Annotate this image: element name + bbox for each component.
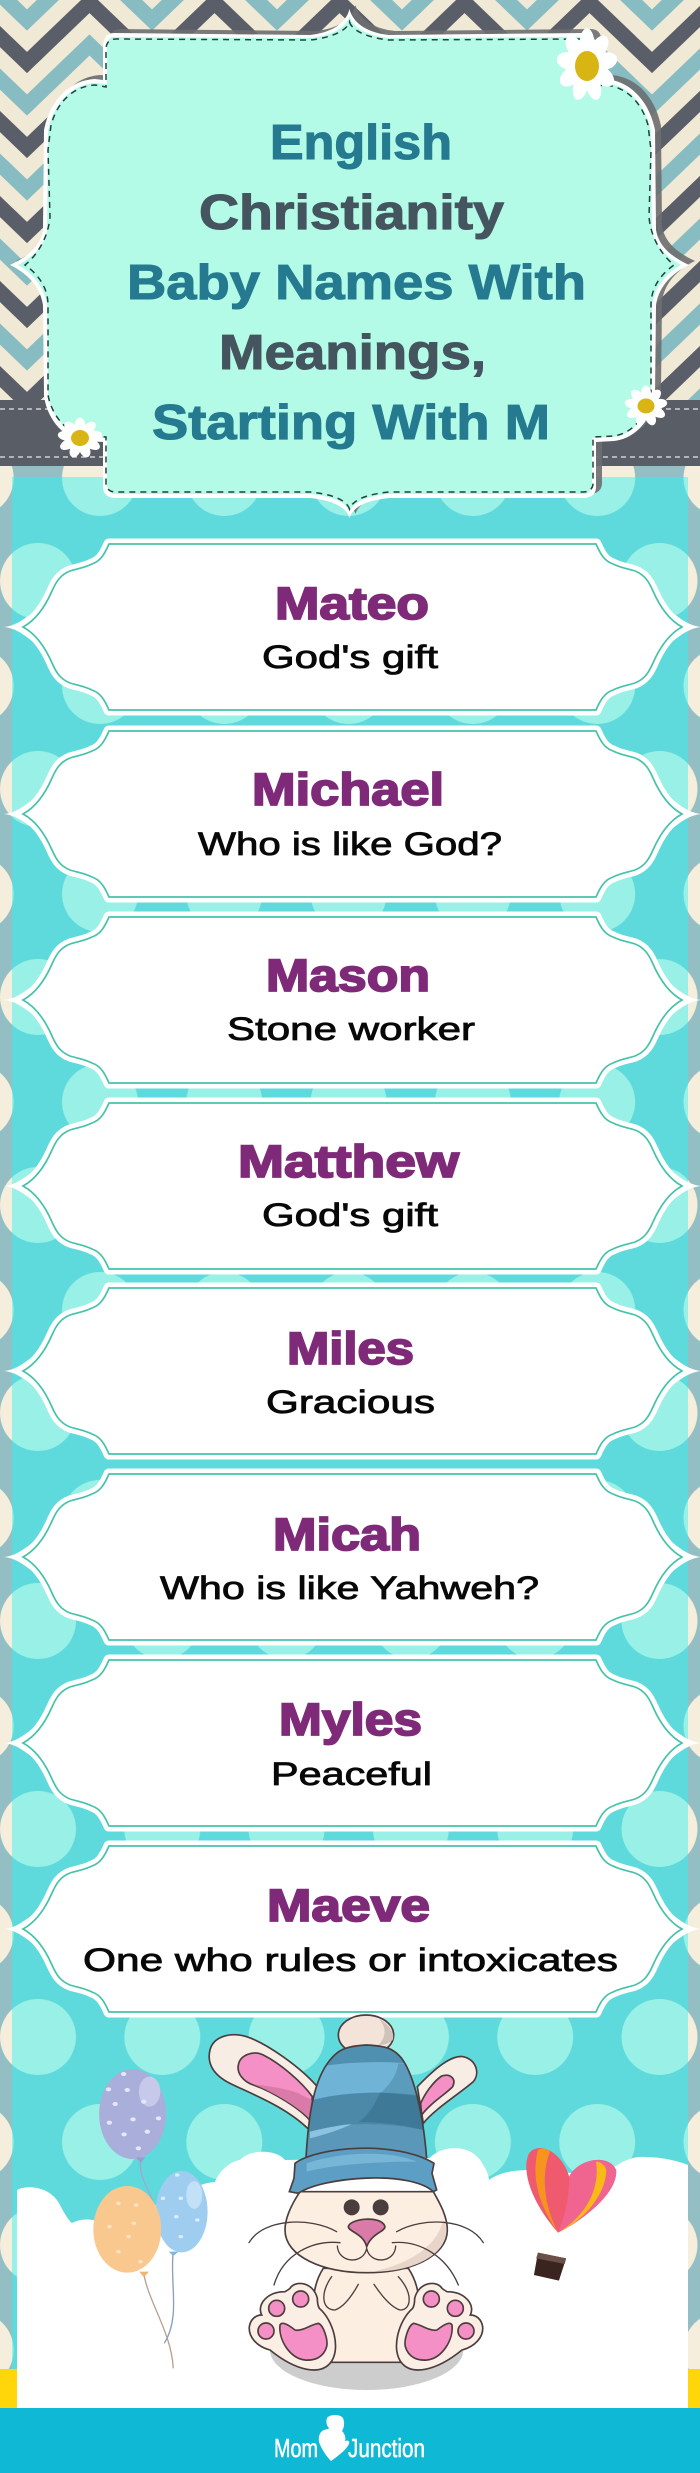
- arms: [324, 2277, 409, 2310]
- eyes: [344, 2199, 389, 2215]
- card: Maeve: [4, 1846, 700, 2012]
- dark ribbon: [0, 400, 700, 466]
- footer bar: [0, 2408, 700, 2473]
- card: Myles: Peaceful: [271, 1756, 432, 1792]
- MomJunction logo: Mom: [274, 2433, 318, 2463]
- MomJunction logo: Junction: [348, 2433, 425, 2463]
- card: Micah: Micah: [273, 1509, 421, 1560]
- title text: Meanings,: [219, 326, 486, 380]
- card: Micah: Who is like Yahweh?: [160, 1570, 539, 1606]
- head: [285, 2192, 447, 2273]
- card: Michael: [4, 731, 700, 897]
- heart hot air balloon: [526, 2148, 616, 2281]
- MomJunction logo: [274, 2415, 425, 2463]
- cheek shade: [373, 2220, 446, 2272]
- logo figure: [319, 2415, 349, 2461]
- balloons: [93, 2069, 208, 2368]
- icon: daisy lower left: [57, 418, 103, 459]
- bunny wearing a blue hat: [209, 2015, 483, 2390]
- nose: [348, 2219, 385, 2247]
- card: Miles: Gracious: [266, 1384, 435, 1420]
- title text: Baby Names With: [127, 256, 586, 310]
- ground shadow: [270, 2310, 463, 2390]
- left ear: [209, 2035, 317, 2131]
- card: Michael: Who is like God?: [198, 826, 502, 862]
- card: Maeve: Maeve: [267, 1880, 430, 1931]
- card: Myles: Myles: [279, 1694, 422, 1745]
- pom-pom: [338, 2015, 394, 2055]
- card: Mason: Stone worker: [227, 1011, 475, 1047]
- card: Michael: Michael: [252, 764, 444, 815]
- card: Maeve: One who rules or intoxicates: [83, 1942, 618, 1978]
- left foot: [249, 2283, 336, 2370]
- card: Mateo: Mateo: [275, 578, 429, 629]
- card: Myles: [4, 1660, 700, 1826]
- card: Matthew: God's gift: [262, 1197, 438, 1233]
- card: Mason: [4, 917, 700, 1083]
- card: Matthew: Matthew: [238, 1136, 460, 1187]
- body: [313, 2268, 419, 2362]
- icon: daisy top right: [556, 28, 618, 102]
- card: Mason: Mason: [266, 950, 430, 1001]
- title text: Starting With M: [152, 396, 550, 450]
- title plaque: [10, 5, 695, 518]
- card: Matthew: [4, 1103, 700, 1269]
- right foot: [396, 2283, 483, 2370]
- right ear: [417, 2057, 477, 2123]
- hat: [289, 2043, 437, 2193]
- card: Miles: [4, 1288, 700, 1454]
- title text: [127, 116, 586, 450]
- title text: English: [270, 116, 452, 170]
- title text: Christianity: [199, 186, 504, 240]
- card: Mateo: God's gift: [262, 639, 438, 675]
- teal polka dot panel: [12, 477, 688, 2408]
- card: Mateo: [4, 544, 700, 710]
- white cloud: [17, 2148, 688, 2408]
- card: Miles: Miles: [287, 1323, 414, 1374]
- yellow corner strips: [0, 2369, 700, 2408]
- card: Micah: [4, 1474, 700, 1640]
- icon: daisy lower right: [624, 386, 668, 427]
- chevron background: [0, 0, 700, 488]
- mouth and whiskers: [249, 2222, 483, 2285]
